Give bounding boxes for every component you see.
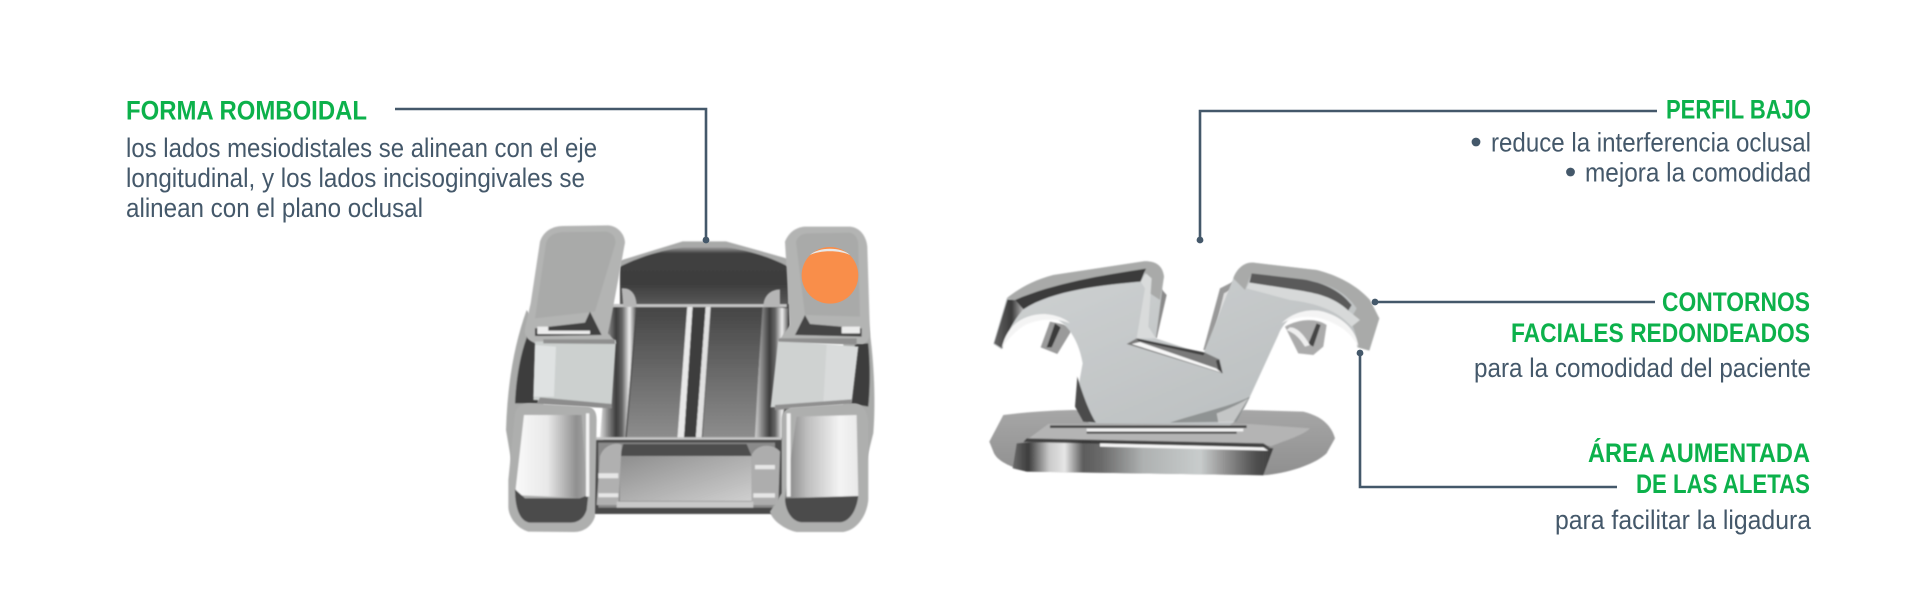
center notch	[1127, 338, 1223, 373]
left wing chrome tip	[994, 299, 1023, 349]
lower diagonal reflection	[1170, 397, 1250, 423]
top right wing with orange identification dot	[778, 227, 870, 344]
bullet list: perfil bajo: mejora la comodidad	[1585, 158, 1811, 188]
heading: contornos faciales redondeados	[1511, 287, 1810, 348]
body text: contornos faciales: para la comodidad del paciente	[1474, 353, 1811, 383]
body text: forma romboidal: los lados mesiodistales se alinean con el eje	[126, 133, 597, 163]
heading: perfil bajo: PERFIL BAJO	[1666, 94, 1811, 124]
wing under arcs	[1002, 314, 1070, 348]
bracket front view	[506, 225, 874, 532]
middle right block	[771, 338, 858, 410]
heading: contornos faciales redondeados: CONTORNOS	[1662, 287, 1810, 317]
top left wing	[525, 225, 625, 343]
icon: orange dot	[802, 247, 858, 304]
bracket side view	[989, 261, 1379, 475]
heading: area aumentada de las aletas: DE LAS ALETAS	[1636, 469, 1810, 499]
left wing outer rim	[1007, 261, 1164, 300]
top arch	[620, 241, 790, 310]
callout: area aumentada de las aletas	[1357, 350, 1812, 535]
left stem shadow	[1075, 377, 1096, 423]
right wing inner pocket	[1247, 283, 1360, 327]
side rails behind the wings	[506, 310, 874, 467]
callout: perfil bajo	[1197, 94, 1811, 243]
body text: forma romboidal	[126, 133, 597, 223]
bullet list: perfil bajo: reduce la interferencia oclusal	[1491, 128, 1811, 158]
heading: area aumentada de las aletas	[1588, 437, 1810, 499]
bottom right wing	[770, 403, 868, 532]
leader line: forma romboidal	[395, 109, 709, 243]
bottom left wing	[508, 403, 597, 532]
left wing dark band	[1015, 269, 1146, 309]
heading: area aumentada de las aletas: ÁREA AUMENTADA	[1588, 437, 1810, 468]
heading: contornos faciales redondeados: FACIALES REDONDEADOS	[1511, 318, 1810, 348]
central slot	[595, 288, 790, 441]
right wing dark inner edge	[1249, 273, 1352, 311]
body text: area aumentada: para facilitar la ligadura	[1555, 505, 1812, 535]
left wing corner highlight	[1137, 273, 1156, 338]
base pad	[989, 410, 1335, 475]
bottom floor of the bracket	[593, 440, 783, 514]
callout: contornos faciales redondeados	[1372, 287, 1811, 383]
body text: forma romboidal: longitudinal, y los lados incisogingivales se	[126, 163, 585, 193]
callout: forma romboidal	[126, 96, 709, 243]
bullet list: perfil bajo	[1472, 128, 1811, 188]
leader line: perfil bajo	[1197, 111, 1657, 243]
leader line: contornos faciales	[1372, 299, 1655, 305]
leader line: area aumentada	[1357, 350, 1617, 487]
main body with wings	[993, 261, 1379, 425]
right wing outer rim	[1233, 263, 1379, 351]
heading: forma romboidal: FORMA ROMBOIDAL	[126, 96, 367, 126]
middle left block	[533, 339, 616, 408]
body text: forma romboidal: alinean con el plano oclusal	[126, 193, 423, 223]
back claws	[1041, 282, 1327, 355]
